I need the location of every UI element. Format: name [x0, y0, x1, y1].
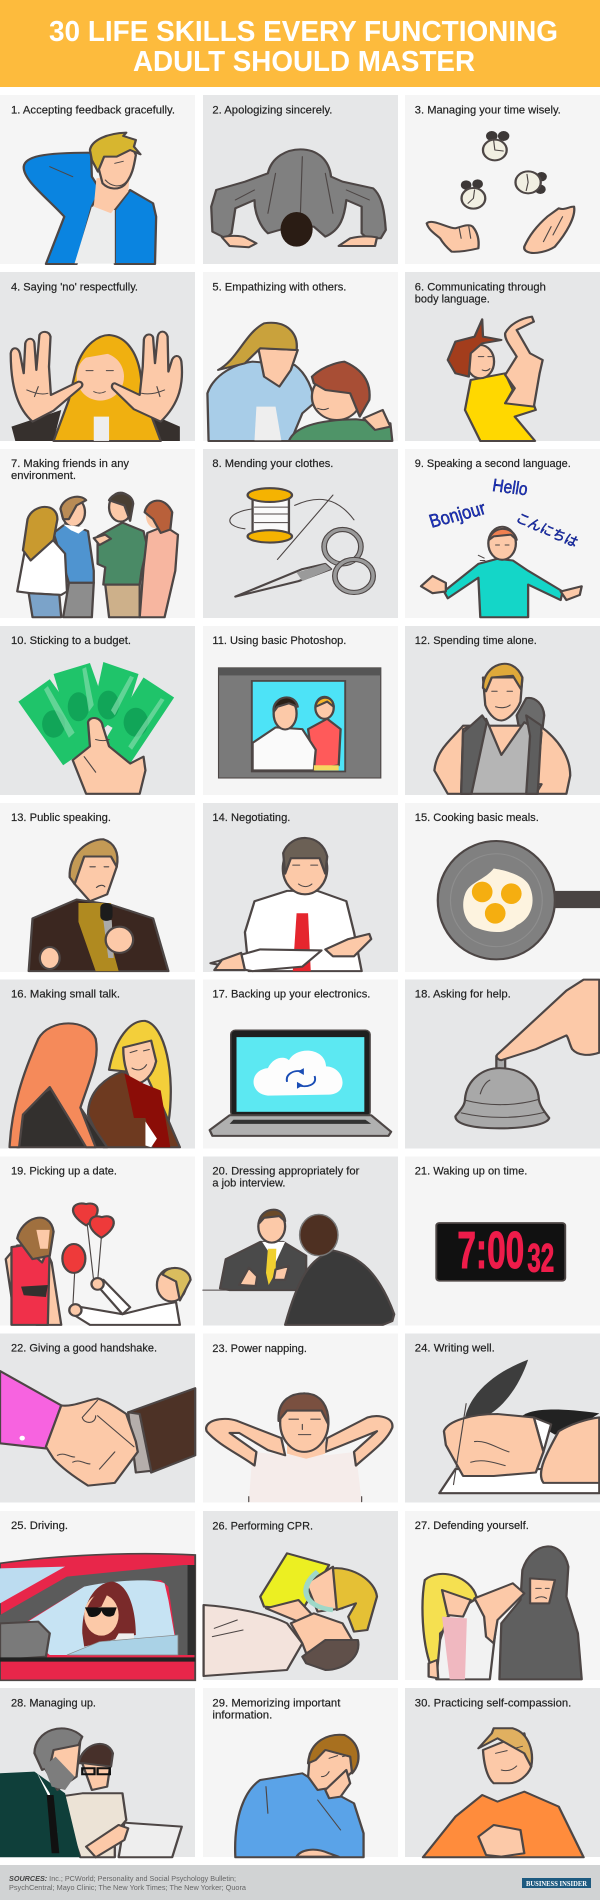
panel: 6 body language	[405, 272, 600, 441]
label 25: 25. Driving.	[11, 1520, 68, 1532]
label 2: 2. Apologizing sincerely.	[212, 104, 332, 116]
panel: 9 second language	[405, 449, 600, 618]
label 1: 1. Accepting feedback gracefully.	[11, 104, 175, 116]
label 16: 16. Making small talk.	[11, 988, 120, 1000]
panel: 4 saying no	[0, 272, 195, 441]
word: Bonjour: Bonjour	[427, 498, 489, 532]
illustration: man with document	[210, 838, 371, 971]
label 26: 26. Performing CPR.	[212, 1520, 313, 1532]
panel: 8 mending clothes	[203, 449, 398, 618]
label 22: 22. Giving a good handshake.	[11, 1342, 157, 1354]
illustration: job interview	[203, 1210, 394, 1325]
label 8: 8. Mending your clothes.	[212, 458, 333, 470]
panel: 17 backing up	[203, 980, 398, 1148]
panel: 3 managing time	[405, 95, 600, 264]
panel: 23 power napping	[203, 1334, 398, 1502]
illustration: man gesturing in yellow shirt	[448, 317, 543, 441]
illustration: man scratching head in blue shirt	[24, 133, 156, 264]
label 29: 29. Memorizing important	[212, 1698, 340, 1710]
label 7: 7. Making friends in any	[11, 458, 130, 470]
label 12: 12. Spending time alone.	[415, 635, 537, 647]
illustration: man thinking, head on hand	[235, 1735, 364, 1857]
panel: 2 apologizing	[203, 95, 398, 264]
label 21: 21. Waking up on time.	[415, 1166, 527, 1178]
panel: 10 budget	[0, 626, 195, 795]
sources: SOURCES: Inc.; PCWorld; Personality and Social Psychology Bulletin;	[9, 1874, 245, 1883]
panel: 30 self-compassion	[405, 1688, 600, 1857]
word: konnichiwa: こんにちは	[513, 510, 581, 550]
panel: 18 asking for help	[405, 980, 600, 1148]
label 13: 13. Public speaking.	[11, 812, 111, 824]
label 24: 24. Writing well.	[415, 1342, 495, 1354]
illustration: boss and employee looking at tablet	[0, 1728, 182, 1857]
label 29: information.	[212, 1710, 272, 1722]
clock time: 7:00	[457, 1222, 524, 1279]
illustration: woman driving red car	[0, 1554, 195, 1680]
panel: 21 waking up on time	[405, 1156, 600, 1326]
label 7: environment.	[11, 470, 76, 482]
label 11: 11. Using basic Photoshop.	[212, 635, 346, 647]
label 3: 3. Managing your time wisely.	[415, 104, 561, 116]
illustration: laptop with cloud sync	[210, 1030, 391, 1136]
illustration: man offering balloons to woman	[6, 1203, 191, 1325]
clock time: 32	[527, 1236, 554, 1280]
sources: PsychCentral; Mayo Clinic; The New York Times; The New Yorker; Quora	[9, 1883, 247, 1892]
illustration: man with greetings in several languages	[421, 476, 582, 617]
illustration: hand writing with quill	[439, 1360, 599, 1493]
label 19: 19. Picking up a date.	[11, 1166, 117, 1178]
label 10: 10. Sticking to a budget.	[11, 635, 131, 647]
panel: 26 CPR	[203, 1511, 398, 1680]
illustration: two people consoling	[207, 323, 392, 441]
illustration: handshake	[0, 1371, 195, 1486]
label 20: 20. Dressing appropriately for	[212, 1166, 360, 1178]
label 9: 9. Speaking a second language.	[415, 458, 571, 470]
label 18: 18. Asking for help.	[415, 988, 511, 1000]
word: Hello: Hello	[491, 476, 529, 500]
panel: 24 writing well	[405, 1334, 600, 1502]
panel: 13 public speaking	[0, 803, 195, 972]
Business Insider logo: BUSINESS INSIDER	[526, 1880, 588, 1888]
label 28: 28. Managing up.	[11, 1698, 96, 1710]
panel: 1 accepting feedback	[0, 95, 195, 264]
panel: 14 negotiating	[203, 803, 398, 972]
label 4: 4. Saying 'no' respectfully.	[11, 282, 138, 294]
label 17: 17. Backing up your electronics.	[212, 988, 370, 1000]
label 15: 15. Cooking basic meals.	[415, 812, 539, 824]
illustration: woman fending off hooded attacker	[423, 1546, 582, 1679]
panel: 5 empathizing	[203, 272, 398, 441]
label 6: 6. Communicating through	[415, 282, 546, 294]
illustration: man bowing in grey hoodie	[211, 149, 386, 247]
illustration: two women talking	[10, 1021, 180, 1147]
illustration: spool, needle and scissors	[230, 488, 373, 597]
label 20: a job interview.	[212, 1178, 285, 1190]
header banner	[0, 0, 600, 87]
illustration: digital alarm clock	[436, 1222, 565, 1281]
panel: 27 defending yourself	[405, 1511, 600, 1680]
illustration: speaker with microphone	[29, 839, 168, 971]
panel: 7 making friends	[0, 449, 195, 618]
label 30: 30. Practicing self-compassion.	[415, 1698, 571, 1710]
illustration: finger pressing service bell	[455, 980, 599, 1128]
label 23: 23. Power napping.	[212, 1343, 307, 1355]
panel: 12 spending time alone	[405, 626, 600, 795]
panel: 22 handshake	[0, 1334, 195, 1502]
title: ADULT SHOULD MASTER	[133, 46, 475, 78]
panel: 15 cooking	[405, 803, 600, 972]
title: 30 LIFE SKILLS EVERY FUNCTIONING	[49, 16, 558, 48]
illustration: group of four people	[17, 493, 178, 617]
panel: 19 picking up a date	[0, 1156, 195, 1326]
illustration: man with hand on chest	[423, 1728, 584, 1857]
panel: 25 driving	[0, 1511, 195, 1680]
panel: 29 memorizing	[203, 1688, 398, 1857]
illustration: frying pan with eggs	[438, 841, 600, 959]
panel: 11 photoshop	[203, 626, 398, 795]
panel: 20 job interview	[203, 1156, 398, 1326]
illustration: man napping with hands behind head	[206, 1393, 392, 1502]
illustration: woman raising palms	[11, 332, 182, 441]
illustration: photo editor window	[219, 668, 381, 778]
panel: 28 managing up	[0, 1688, 195, 1857]
illustration: hand holding dollar bills	[18, 662, 174, 794]
label 6: body language.	[415, 294, 490, 306]
label 27: 27. Defending yourself.	[415, 1520, 529, 1532]
label 14: 14. Negotiating.	[212, 812, 290, 824]
illustration: muscular backpacker	[434, 664, 570, 794]
label 5: 5. Empathizing with others.	[212, 282, 346, 294]
panel: 16 small talk	[0, 980, 195, 1148]
illustration: performing CPR	[204, 1553, 377, 1676]
footer	[0, 1865, 600, 1900]
illustration: juggling alarm clocks	[427, 131, 574, 253]
